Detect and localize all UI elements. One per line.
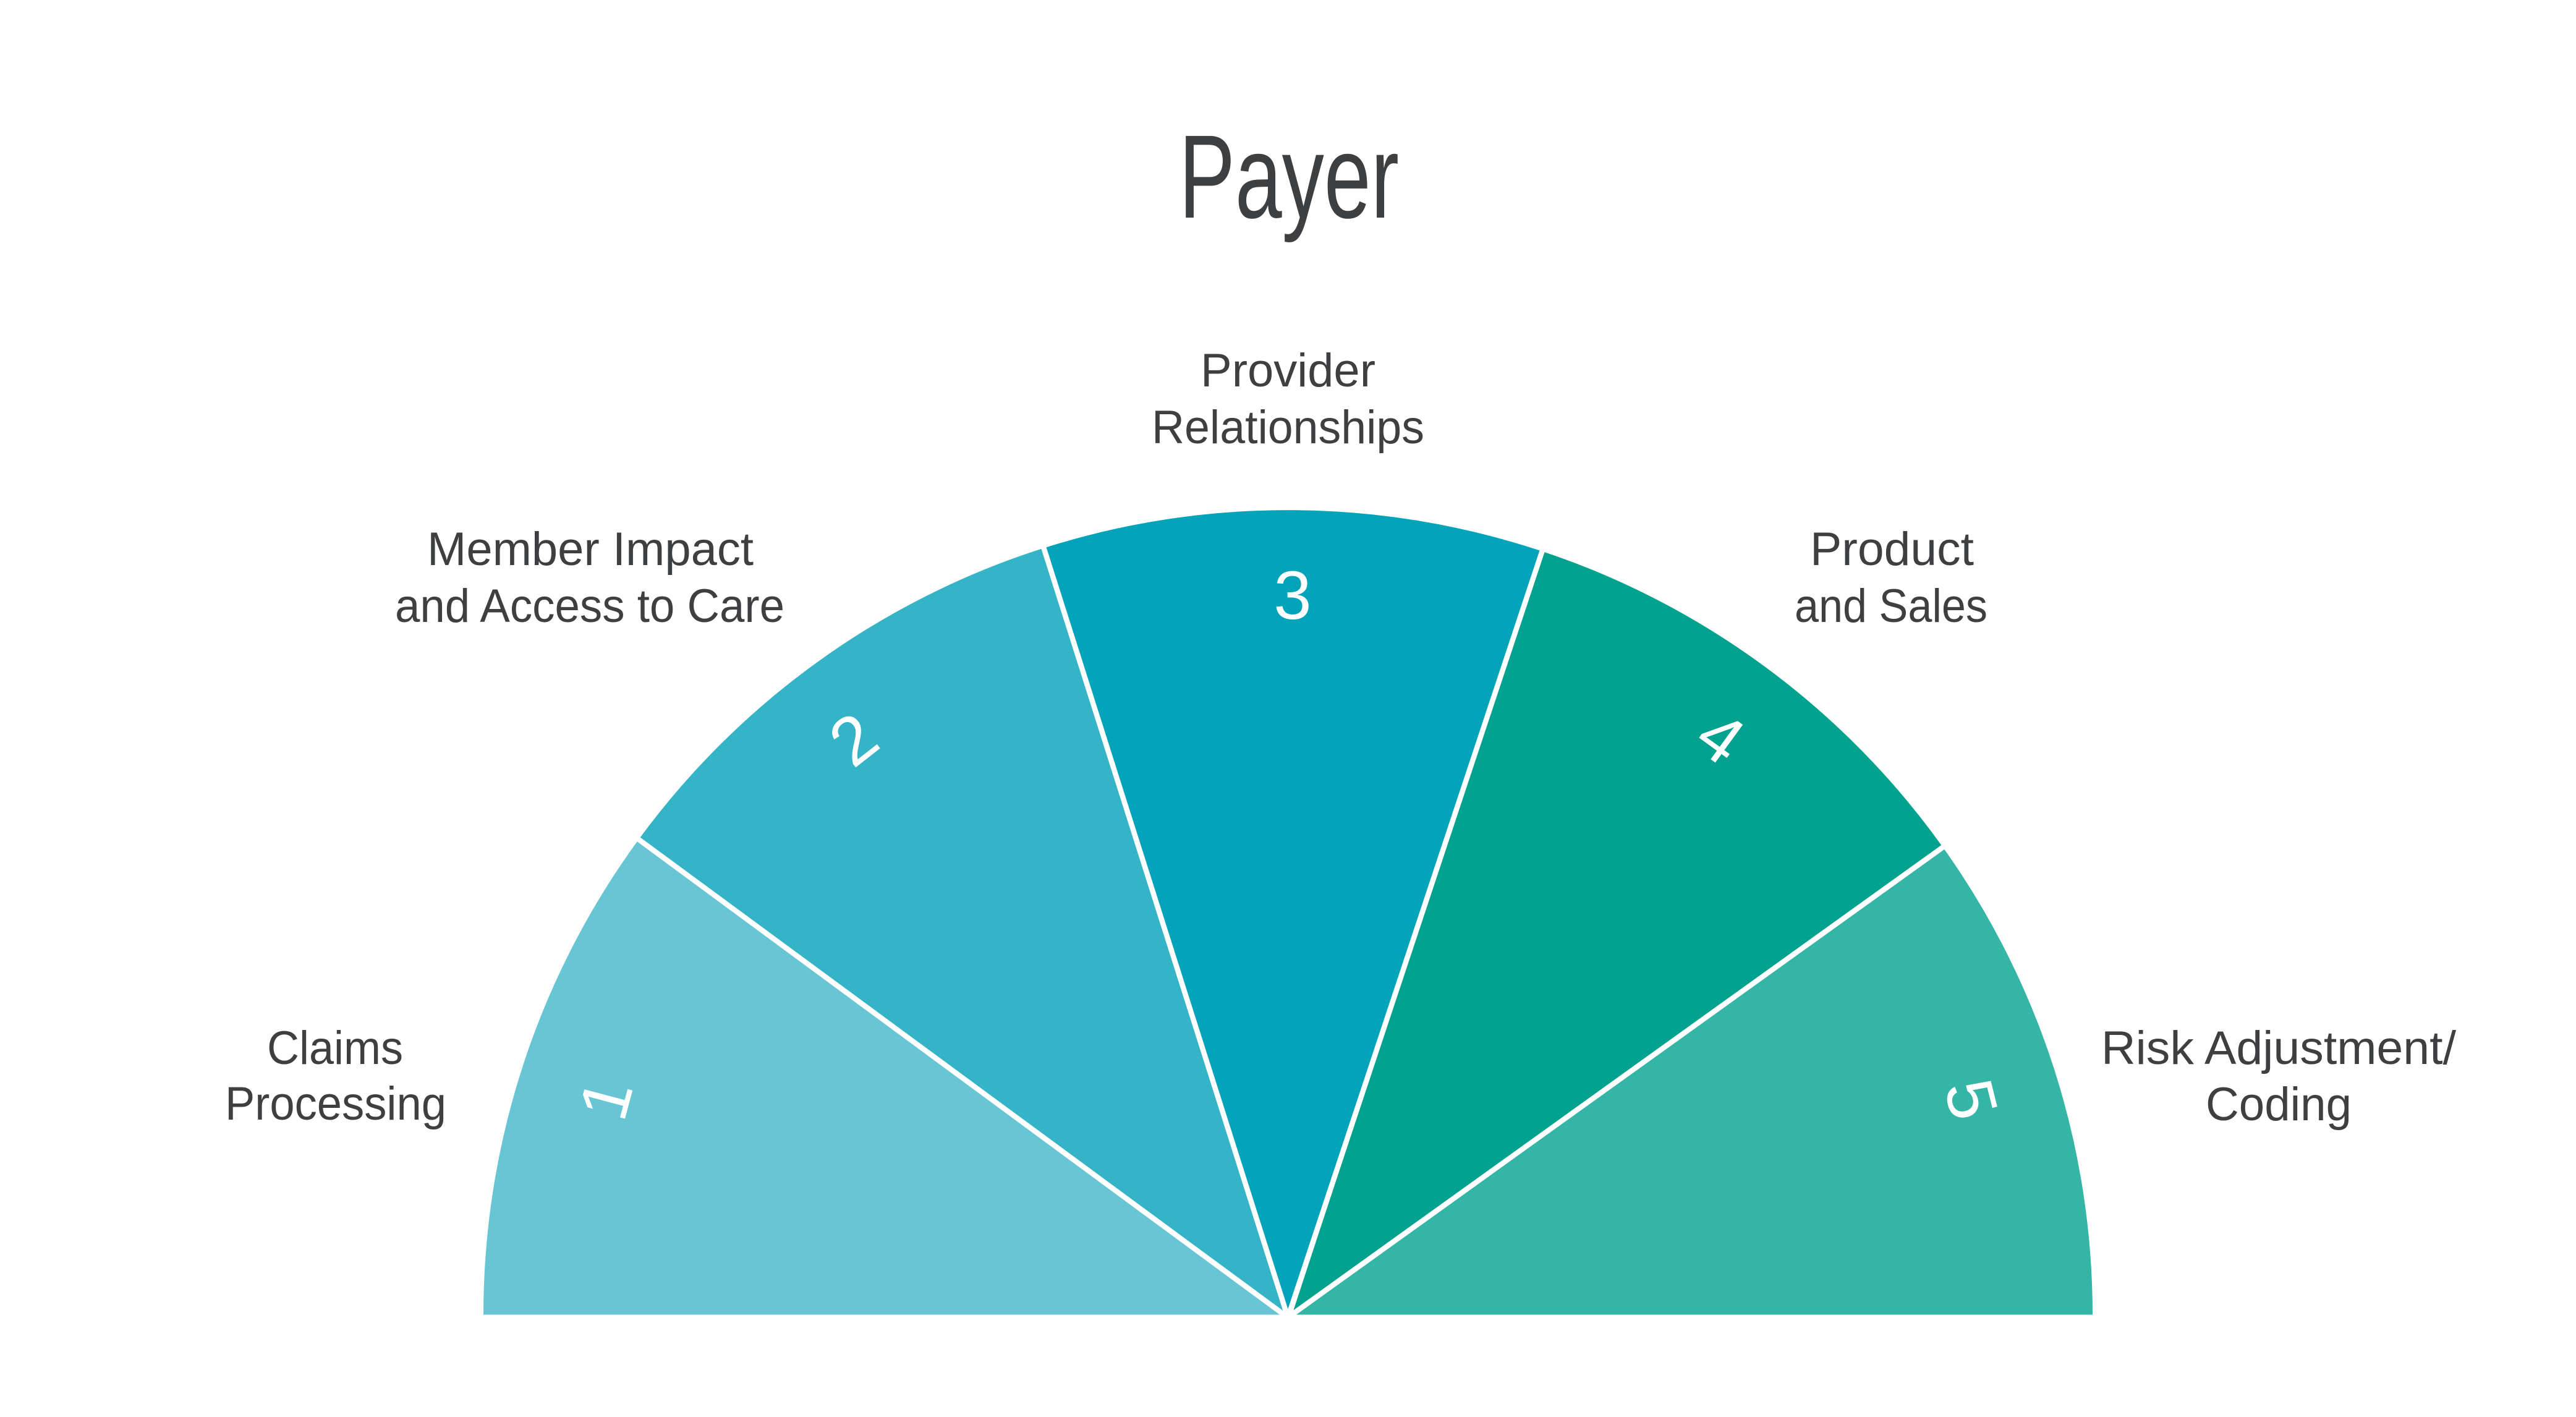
segment 5: Risk Adjustment / Coding [1292, 847, 2093, 1314]
label: Product and Sales: Product [1810, 523, 1974, 576]
segment 3: Provider Relationships [1044, 510, 1542, 1314]
label: Risk Adjustment / Coding: Coding [2206, 1078, 2352, 1131]
semicircle gauge chart [483, 510, 2093, 1321]
label: Claims Processing: Processing [225, 1078, 446, 1130]
label: Claims Processing: Claims [267, 1022, 403, 1074]
number 3: 3 [1273, 558, 1312, 634]
label: Member Impact and Access to Care: and Access to Care [395, 580, 784, 632]
label: Provider Relationships: Provider [1201, 344, 1375, 397]
label: Member Impact and Access to Care [395, 523, 784, 632]
label: Product and Sales: and Sales [1795, 580, 1987, 632]
number 4: 4 [1683, 696, 1758, 780]
segment 4: Product and Sales [1292, 551, 1943, 1315]
label: Risk Adjustment / Coding: Risk Adjustment/ [2101, 1022, 2457, 1074]
label: Risk Adjustment / Coding [2101, 1022, 2457, 1131]
number 1: 1 [564, 1071, 648, 1128]
number 5: 5 [1929, 1072, 2013, 1127]
label: Product and Sales [1795, 523, 1987, 632]
label: Provider Relationships [1152, 344, 1424, 454]
label: Member Impact and Access to Care: Member Impact [427, 523, 754, 576]
number 2: 2 [815, 698, 892, 781]
label: Provider Relationships: Relationships [1152, 401, 1424, 454]
title: Payer [1179, 110, 1399, 243]
label: Claims Processing [225, 1022, 446, 1130]
segment 1: Claims Processing [483, 840, 1284, 1314]
segment 2: Member Impact and Access to Care [639, 548, 1287, 1314]
